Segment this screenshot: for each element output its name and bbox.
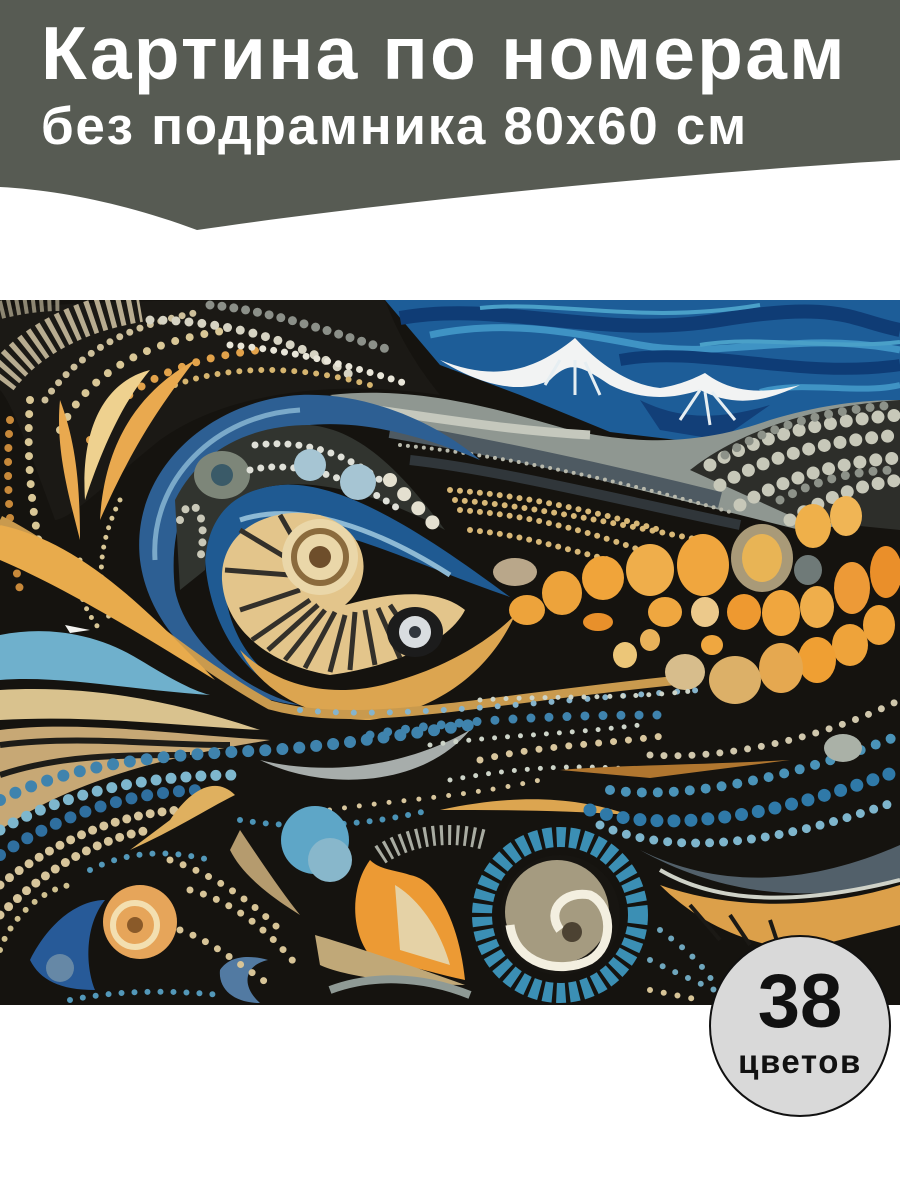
central nautilus shell bbox=[222, 513, 465, 675]
lower blue dotted bands bbox=[0, 690, 790, 915]
top-left fans and dots bbox=[0, 300, 440, 630]
small orange shell and blue shells bbox=[0, 806, 352, 1003]
badge: 38 colours: 38 bbox=[758, 959, 842, 1044]
badge: 38 colours: цветов bbox=[738, 1043, 862, 1080]
dotted area under grey band bbox=[450, 490, 700, 586]
spotted grey panel with white dots bbox=[175, 425, 445, 590]
blue swirl around central shell bbox=[139, 395, 510, 705]
painting: seashells and sea bbox=[0, 300, 900, 1005]
pebbles top right bbox=[690, 400, 900, 530]
fan shell bottom centre bbox=[315, 835, 485, 995]
sea with waves bbox=[385, 300, 900, 445]
header banner bbox=[0, 0, 900, 230]
right blue dotted bands bbox=[590, 700, 900, 950]
subtitle: без подрамника 80х60 см bbox=[41, 97, 748, 156]
grey band below sea bbox=[330, 393, 900, 530]
bottom right dots bbox=[650, 930, 730, 1000]
left teal wave and feathers bbox=[0, 525, 270, 830]
golden ribbon under shell bbox=[0, 520, 680, 720]
bottom spiral shell with teal ring bbox=[482, 837, 638, 993]
title: Картина по номерам bbox=[41, 11, 847, 95]
orange beads bbox=[509, 496, 900, 704]
badge: 38 colours bbox=[709, 935, 891, 1117]
